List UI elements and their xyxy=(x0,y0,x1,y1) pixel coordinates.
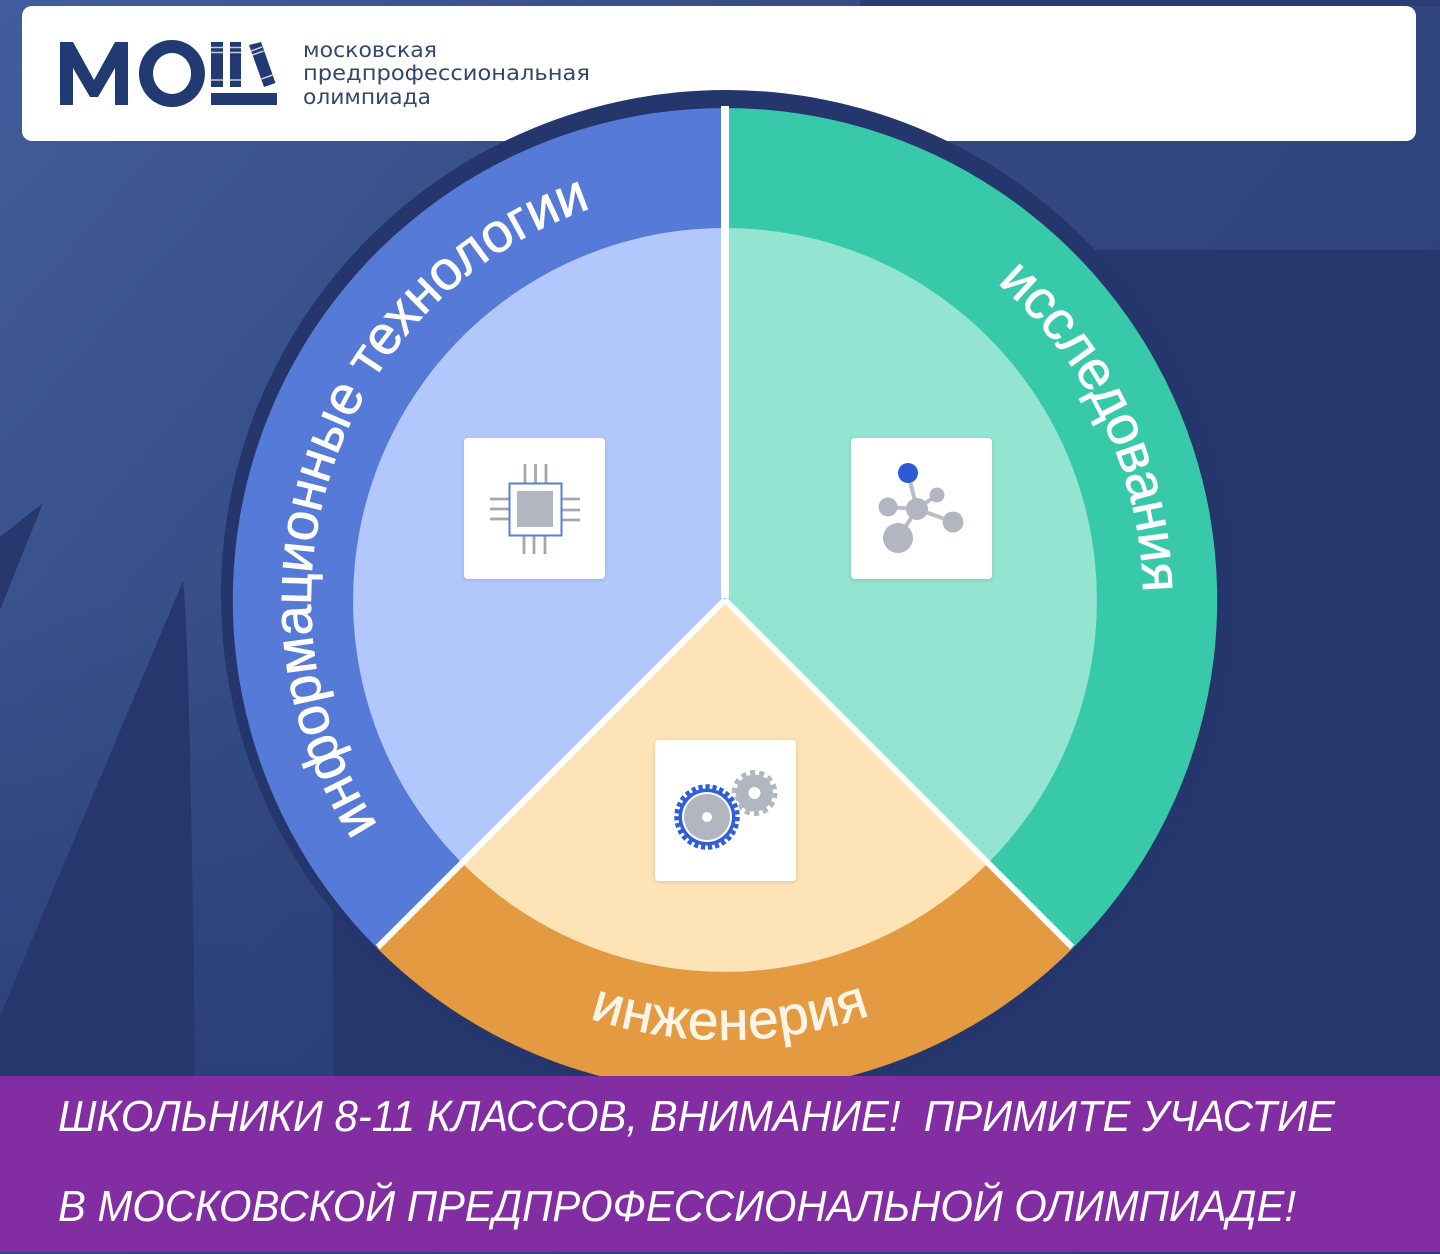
white dividers xyxy=(378,106,1072,947)
label: информационные технологии: информационные технологии xyxy=(281,182,588,838)
logo: books icon xyxy=(211,42,277,105)
segment: исследования xyxy=(725,108,1218,948)
logo text: московская xyxy=(303,38,437,63)
label: инженерия: инженерия xyxy=(592,988,868,1048)
header panel xyxy=(22,6,1416,141)
label: исследования: исследования xyxy=(1000,264,1173,590)
wheel diagram xyxy=(221,90,1218,1076)
logo text: предпрофессиональная xyxy=(303,61,590,86)
call to action banner xyxy=(0,1076,1440,1252)
banner line 1: ШКОЛЬНИКИ 8-11 КЛАССОВ, ВНИМАНИЕ! ПРИМИТЕ УЧАСТИЕ xyxy=(58,1092,1336,1141)
segment: информационные технологии xyxy=(232,108,725,948)
icon card: gears xyxy=(655,740,796,881)
logo text: олимпиада xyxy=(303,85,431,110)
segment: инженерия xyxy=(377,604,1073,1076)
icon card: molecule xyxy=(851,438,992,579)
logo text xyxy=(303,38,590,110)
banner line 2: В МОСКОВСКОЙ ПРЕДПРОФЕССИОНАЛЬНОЙ ОЛИМПИАДЕ! xyxy=(58,1180,1296,1231)
icon card: chip xyxy=(464,438,605,579)
logo: МО letters xyxy=(60,40,205,107)
